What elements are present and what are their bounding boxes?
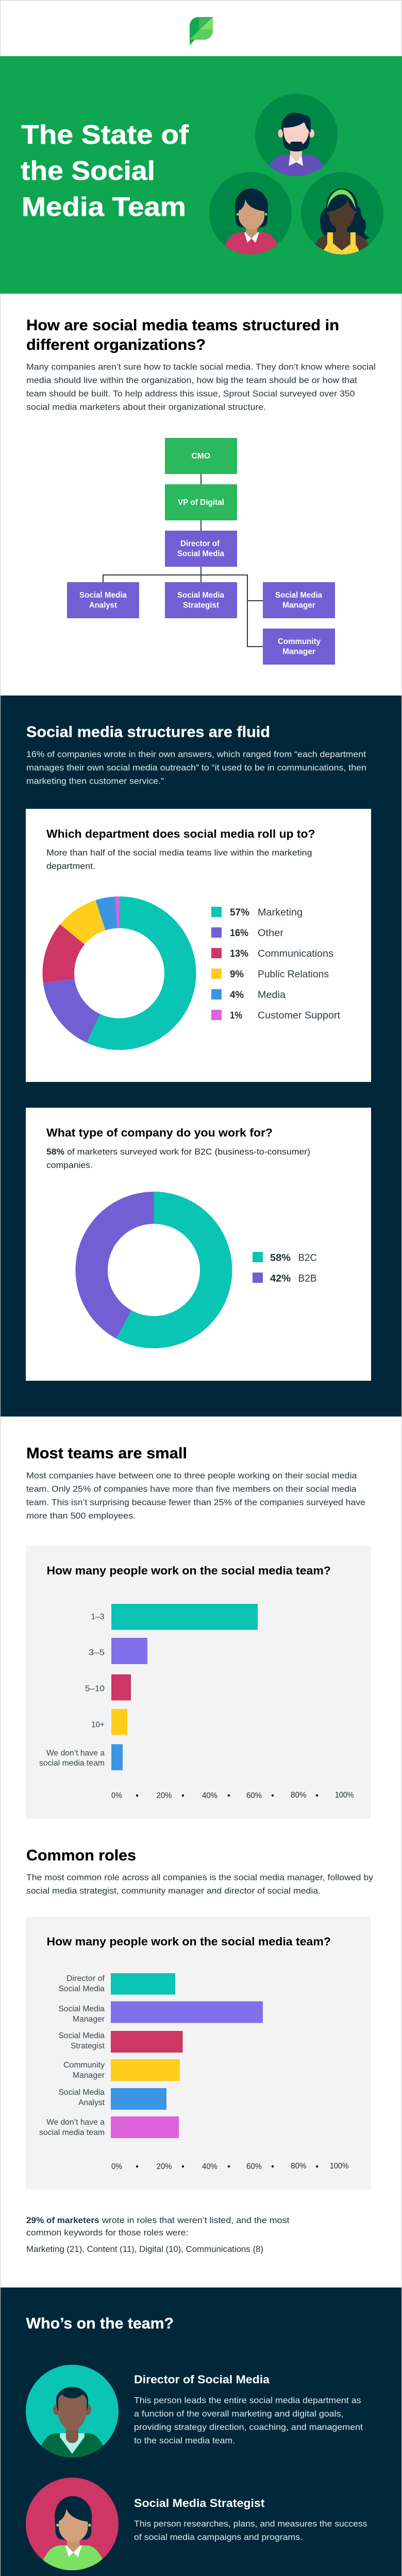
text block: This person leads the entire social media department as: [134, 2396, 361, 2405]
box: Social Media Strategist: [165, 582, 237, 618]
heading: Social Media Strategist: [134, 2497, 265, 2510]
heading: How many people work on the social media team?: [46, 1564, 331, 1577]
panel: company type card: [26, 1108, 371, 1381]
legend: departments: 57%: [230, 907, 249, 918]
bar chart: roles: Manager: [73, 2015, 105, 2024]
heading: [26, 317, 339, 353]
icon: strategist avatar: [26, 2478, 119, 2576]
box: Community Manager: Manager: [282, 647, 315, 656]
box: VP of Digital: [165, 484, 237, 520]
axis: roles percent: 60%: [246, 2162, 262, 2171]
legend: departments: Public Relations: [258, 969, 329, 980]
box: CMO: CMO: [192, 452, 210, 461]
chart: org chart: [67, 438, 335, 665]
legend: departments: Other: [258, 928, 284, 939]
panel: common roles: [26, 1847, 374, 2254]
box: Director of Social Media: Social Media: [177, 549, 224, 558]
bar chart: team size: [39, 1604, 258, 1770]
text block: 58%: [46, 1147, 64, 1157]
panel: who's on the team: [1, 2287, 401, 2576]
text block: [134, 2519, 367, 2542]
text block: [134, 2396, 363, 2445]
panel: social media structures are fluid: [1, 696, 401, 1417]
box: Social Media Manager: [263, 582, 335, 618]
text block: of marketers surveyed work for B2C (business-to-consumer): [67, 1147, 310, 1157]
bar chart: roles: We don’t have a: [46, 2118, 105, 2127]
legend: departments: 4%: [230, 990, 244, 1001]
axis: team size percent: 80%: [291, 1791, 307, 1800]
bar chart: team size: We don’t have a: [46, 1749, 105, 1758]
axis: roles percent: [111, 2162, 349, 2171]
text block: companies.: [46, 1161, 93, 1170]
panel: hero banner: [0, 56, 402, 294]
text block: team. This isn’t surprising because fewer than 25% of the companies surveyed have: [26, 1498, 365, 1507]
legend: company type: 58%: [270, 1253, 291, 1263]
text block: providing strategy direction, coaching, and management: [134, 2422, 363, 2432]
text block: [26, 1471, 365, 1521]
text block: The most common role across all companies is the social media manager, followed by: [26, 1873, 374, 1883]
text block: intro: Many companies aren’t sure how to tackle social media. They don’t know where social: [26, 363, 376, 372]
bar chart: roles: Analyst: [78, 2098, 105, 2107]
text block: write-in roles: [26, 2216, 290, 2254]
text block: [46, 1147, 310, 1170]
text block: more than 500 employees.: [26, 1512, 136, 1521]
box: Community Manager: [263, 629, 335, 665]
axis: roles percent: 0%: [111, 2162, 122, 2171]
panel: department card: [26, 809, 371, 1082]
text block: write-in roles: 29% of marketers: [26, 2216, 99, 2225]
legend: company type: B2C: [298, 1253, 317, 1263]
bar chart: roles: Strategist: [71, 2042, 105, 2050]
bar chart: roles: Community: [63, 2061, 105, 2070]
legend: departments: 1%: [230, 1010, 242, 1021]
panel: how teams are structured: [26, 317, 376, 665]
text block: Most companies have between one to three people working on their social media: [26, 1471, 357, 1481]
heading: How many people work on the social media team?: [46, 1935, 331, 1948]
legend: departments: 13%: [230, 948, 248, 959]
text block: social media strategist, community manager and director of social media.: [26, 1887, 321, 1896]
text block: team. Only 25% of companies have more than five members on their social media: [26, 1485, 357, 1494]
bar chart: roles: social media team: [39, 2128, 105, 2137]
box: Social Media Manager: Manager: [282, 601, 315, 610]
text block: [26, 750, 366, 786]
legend: company type: B2B: [298, 1274, 316, 1284]
legend: company type: [253, 1252, 317, 1284]
box: Social Media Strategist: Strategist: [183, 601, 219, 610]
icon: sprout logo: [190, 17, 213, 45]
icon: woman with headband avatar: [301, 172, 383, 260]
panel: team size chart: [26, 1546, 371, 1819]
axis: team size percent: 60%: [246, 1791, 262, 1800]
heading: What type of company do you work for?: [46, 1126, 273, 1139]
heading: Which department does social media roll up to?: [46, 827, 315, 840]
text block: write-in roles: wrote in roles that weren’t listed, and the most: [102, 2216, 290, 2225]
box: Social Media Manager: Social Media: [275, 591, 322, 600]
axis: team size percent: 40%: [202, 1791, 217, 1800]
heading: Most teams are small: [26, 1445, 187, 1462]
axis: team size percent: 0%: [111, 1791, 122, 1800]
bar chart: team size: 3–5: [89, 1649, 105, 1657]
panel: most teams are small: [26, 1445, 371, 1819]
icon: bearded man avatar: [255, 94, 338, 181]
title: The State of: [21, 120, 189, 150]
title: the Social: [21, 156, 155, 186]
bar chart: team size: 10+: [91, 1721, 105, 1729]
legend: departments: Communications: [258, 948, 333, 959]
title: [21, 120, 189, 222]
box: Director of Social Media: Director of: [180, 539, 220, 548]
bar chart: roles: Social Media: [59, 2088, 105, 2097]
axis: team size percent: 100%: [335, 1791, 354, 1800]
axis: roles percent: 100%: [330, 2162, 349, 2171]
panel: roles chart: [26, 1917, 371, 2190]
icon: director avatar: [26, 2365, 119, 2463]
axis: team size percent: [111, 1791, 354, 1800]
bar chart: team size: social media team: [39, 1759, 105, 1768]
text block: intro: [26, 363, 376, 412]
icon: woman with bob avatar: [209, 172, 292, 260]
text block: [46, 848, 312, 871]
box: CMO: [165, 438, 237, 474]
axis: roles percent: 20%: [157, 2162, 172, 2171]
chart: department donut: [58, 912, 180, 1034]
bar chart: team size: 5–10: [85, 1685, 105, 1693]
heading: Social media structures are fluid: [26, 723, 270, 741]
text block: intro: media should live within the organization, how big the team should be or how that: [26, 376, 357, 385]
text block: marketing then customer service.”: [26, 777, 164, 786]
legend: departments: Marketing: [258, 907, 303, 918]
bar chart: roles: [39, 1973, 263, 2138]
heading: Director of Social Media: [134, 2373, 270, 2386]
text block: manages their own social media outreach” to “it used to be in communications, then: [26, 764, 366, 773]
box: VP of Digital: VP of Digital: [178, 498, 224, 507]
legend: departments: 9%: [230, 969, 244, 980]
text block: write-in roles: Marketing (21), Content (11), Digital (10), Communications (8): [26, 2245, 263, 2254]
legend: departments: Customer Support: [258, 1010, 341, 1021]
bar chart: team size: 1–3: [91, 1613, 104, 1621]
heading: different organizations?: [26, 336, 206, 353]
text block: intro: social media marketers about their organizational structure.: [26, 403, 266, 412]
text block: write-in roles: common keywords for those roles were:: [26, 2228, 189, 2238]
chart: company type donut: [92, 1208, 216, 1332]
box: Community Manager: Community: [278, 637, 321, 646]
title: Media Team: [22, 192, 186, 222]
text block: 16% of companies wrote in their own answers, which ranged from “each department: [26, 750, 366, 759]
text block: This person researches, plans, and measures the success: [134, 2519, 367, 2529]
heading: Common roles: [26, 1847, 136, 1864]
bar chart: roles: Manager: [73, 2071, 105, 2080]
text block: [26, 1873, 374, 1896]
axis: team size percent: 20%: [157, 1791, 172, 1800]
legend: departments: [211, 907, 341, 1021]
text block: of social media campaigns and programs.: [134, 2533, 303, 2542]
bar chart: roles: Social Media: [59, 2005, 105, 2013]
bar chart: roles: Director of: [66, 1974, 105, 1983]
text block: a function of the overall marketing and digital goals,: [134, 2409, 343, 2418]
box: Social Media Strategist: Social Media: [177, 591, 224, 600]
legend: departments: 16%: [230, 928, 248, 939]
axis: roles percent: 80%: [291, 2162, 307, 2171]
box: Social Media Analyst: Analyst: [89, 601, 117, 610]
text block: to the social media team.: [134, 2436, 235, 2445]
bar chart: roles: Social Media: [59, 2031, 105, 2040]
role: director: [26, 2365, 363, 2463]
heading: Who’s on the team?: [26, 2315, 174, 2332]
heading: How are social media teams structured in: [26, 317, 339, 334]
box: Social Media Analyst: Social Media: [79, 591, 127, 600]
text block: department.: [46, 861, 95, 871]
role: strategist: [26, 2478, 367, 2576]
text block: More than half of the social media teams live within the marketing: [46, 848, 312, 857]
bar chart: roles: Social Media: [59, 1985, 105, 1993]
legend: departments: Media: [258, 990, 286, 1001]
axis: roles percent: 40%: [202, 2162, 217, 2171]
text block: intro: team should be built. To help address this issue, Sprout Social surveyed over 350: [26, 389, 355, 399]
box: Director of Social Media: [165, 531, 237, 567]
box: Social Media Analyst: [67, 582, 139, 618]
legend: company type: 42%: [270, 1274, 291, 1284]
